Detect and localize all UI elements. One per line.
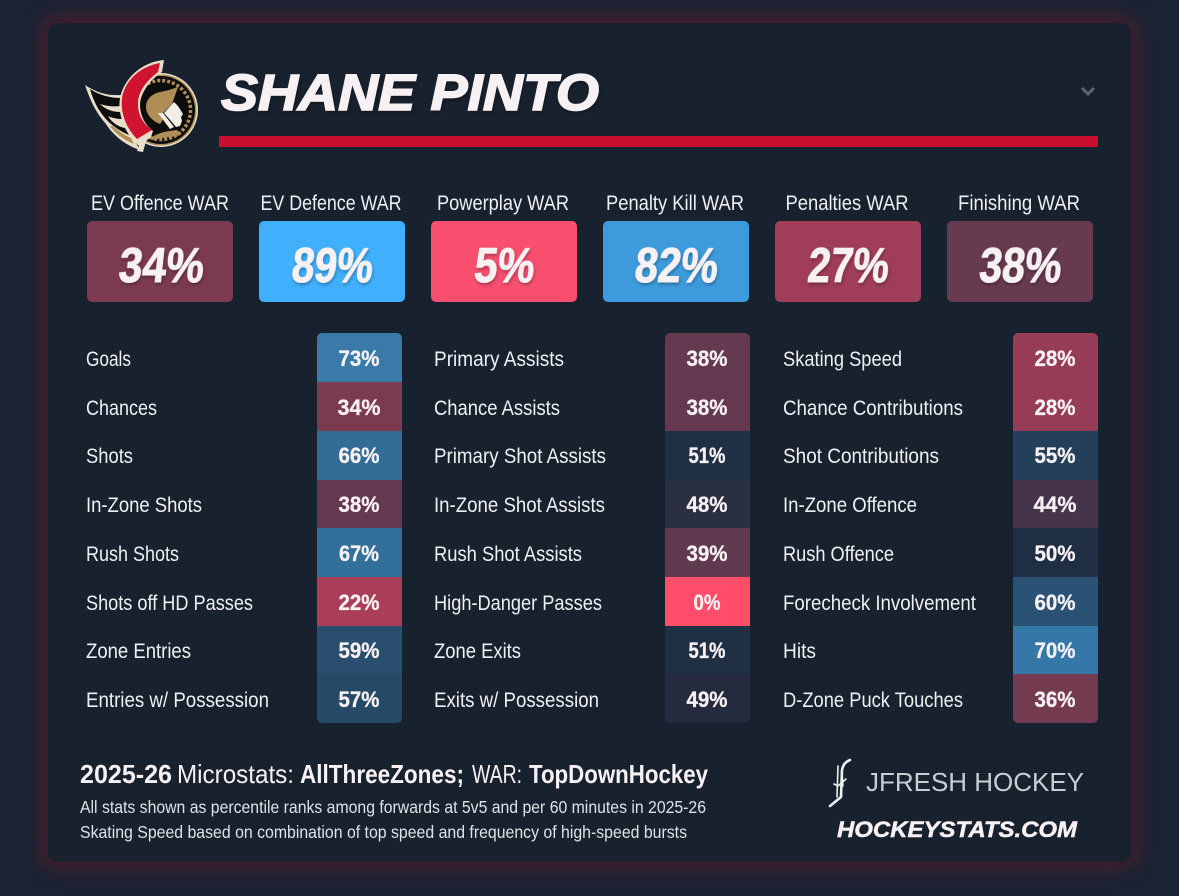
panel: speed and involvement stats column: 70%: [1034, 638, 1076, 663]
footer: notes: Skating Speed based on combination of top speed and frequency of high-speed bursts: [80, 822, 687, 842]
panel: shooting and transition stats column: 57%: [338, 687, 380, 712]
panel: passing and exits stats column: In-Zone Shot Assists: [434, 494, 605, 517]
WAR tile: EV Offence: EV Offence WAR: [91, 192, 229, 215]
panel: speed and involvement stats column: In-Zone Offence: [783, 494, 917, 517]
panel: shooting and transition stats column: 22%: [338, 590, 380, 615]
panel: shooting and transition stats column: 67%: [339, 541, 379, 566]
title rule: [219, 136, 1098, 147]
panel: shooting and transition stats column: 34%: [338, 395, 380, 420]
panel: passing and exits stats column: 51%: [688, 638, 726, 663]
panel: speed and involvement stats column: D-Zone Puck Touches: [783, 689, 963, 712]
panel: shooting and transition stats column: 59%: [338, 638, 380, 663]
panel: passing and exits stats column: 49%: [686, 687, 728, 712]
panel: passing and exits stats column: Rush Shot Assists: [434, 543, 582, 566]
panel: shooting and transition stats column: 66%: [338, 443, 380, 468]
panel: shooting and transition stats column: In-Zone Shots: [86, 494, 202, 517]
panel: shooting and transition stats column: Goals: [86, 348, 131, 371]
icon: chevron: [1082, 88, 1094, 94]
panel: shooting and transition stats column: 73%: [338, 346, 380, 371]
logo: JFresh Hockey: [830, 760, 1084, 806]
title: SHANE PINTO: [221, 64, 599, 121]
panel: WAR summary tiles: [87, 192, 1093, 302]
panel: passing and exits stats column: Primary Assists: [434, 348, 564, 371]
panel: speed and involvement stats column: 44%: [1034, 492, 1076, 517]
WAR tile: Penalty Kill: 82%: [632, 239, 721, 293]
footer: sources: TopDownHockey: [529, 759, 708, 789]
WAR tile: Penalty Kill: [603, 192, 749, 302]
panel: passing and exits stats column: [434, 333, 750, 723]
WAR tile: Penalties: 27%: [805, 239, 892, 293]
panel: shooting and transition stats column: Rush Shots: [86, 543, 179, 566]
panel: shooting and transition stats column: Shots: [86, 445, 133, 468]
WAR tile: Penalty Kill: Penalty Kill WAR: [606, 192, 744, 215]
panel: shooting and transition stats column: Zone Entries: [86, 640, 191, 663]
panel: speed and involvement stats column: [783, 333, 1098, 723]
panel: speed and involvement stats column: Hits: [783, 640, 816, 663]
WAR tile: EV Defence: 89%: [289, 239, 376, 293]
panel: passing and exits stats column: 38%: [686, 395, 728, 420]
WAR tile: Powerplay: 5%: [472, 239, 538, 293]
panel: speed and involvement stats column: 55%: [1034, 443, 1076, 468]
panel: passing and exits stats column: High-Danger Passes: [434, 592, 602, 615]
WAR tile: Finishing: 38%: [977, 239, 1065, 293]
panel: shooting and transition stats column: Shots off HD Passes: [86, 592, 253, 615]
WAR tile: Penalties: [775, 192, 921, 302]
panel: speed and involvement stats column: 28%: [1034, 346, 1076, 371]
footer: sources: 2025-26: [80, 759, 172, 789]
footer: sources: Microstats:: [177, 759, 294, 789]
panel: passing and exits stats column: 0%: [694, 590, 720, 615]
panel: shooting and transition stats column: 38%: [338, 492, 380, 517]
panel: passing and exits stats column: 48%: [686, 492, 728, 517]
footer: sources: AllThreeZones;: [300, 759, 464, 789]
WAR tile: EV Offence: 34%: [116, 239, 207, 293]
WAR tile: Powerplay: [431, 192, 577, 302]
logo: JFresh Hockey: JFRESH HOCKEY: [866, 767, 1084, 797]
panel: speed and involvement stats column: Forecheck Involvement: [783, 592, 976, 615]
panel: speed and involvement stats column: Chance Contributions: [783, 397, 963, 420]
panel: passing and exits stats column: 38%: [686, 346, 728, 371]
panel: speed and involvement stats column: 50%: [1034, 541, 1076, 566]
footer: notes: All stats shown as percentile ranks among forwards at 5v5 and per 60 minutes in 2025-26: [80, 797, 706, 817]
panel: speed and involvement stats column: 60%: [1034, 590, 1076, 615]
icon: crossed hockey sticks: [830, 760, 850, 806]
panel: speed and involvement stats column: 28%: [1034, 395, 1076, 420]
WAR tile: Finishing: [947, 192, 1093, 302]
panel: speed and involvement stats column: Shot Contributions: [783, 445, 939, 468]
panel: passing and exits stats column: 39%: [686, 541, 728, 566]
WAR tile: Penalties: Penalties WAR: [786, 192, 908, 215]
panel: speed and involvement stats column: Rush Offence: [783, 543, 894, 566]
WAR tile: Finishing: Finishing WAR: [958, 192, 1080, 215]
panel: shooting and transition stats column: Chances: [86, 397, 157, 420]
WAR tile: EV Defence: [259, 192, 405, 302]
panel: passing and exits stats column: Primary Shot Assists: [434, 445, 606, 468]
panel: passing and exits stats column: Chance Assists: [434, 397, 560, 420]
panel: speed and involvement stats column: 36%: [1034, 687, 1076, 712]
panel: shooting and transition stats column: [86, 333, 402, 723]
panel: speed and involvement stats column: Skating Speed: [783, 348, 902, 371]
website label: HOCKEYSTATS.COM: [837, 817, 1078, 842]
WAR tile: EV Defence: EV Defence WAR: [260, 192, 402, 215]
panel: passing and exits stats column: Zone Exits: [434, 640, 521, 663]
footer: sources: [80, 759, 708, 789]
panel: passing and exits stats column: 51%: [688, 443, 726, 468]
icon: Ottawa Senators logo: [85, 60, 198, 152]
footer: sources: WAR:: [472, 759, 522, 789]
panel: shooting and transition stats column: Entries w/ Possession: [86, 689, 269, 712]
WAR tile: EV Offence: [87, 192, 233, 302]
WAR tile: Powerplay: Powerplay WAR: [437, 192, 569, 215]
footer: notes: [80, 797, 706, 842]
panel: passing and exits stats column: Exits w/ Possession: [434, 689, 599, 712]
